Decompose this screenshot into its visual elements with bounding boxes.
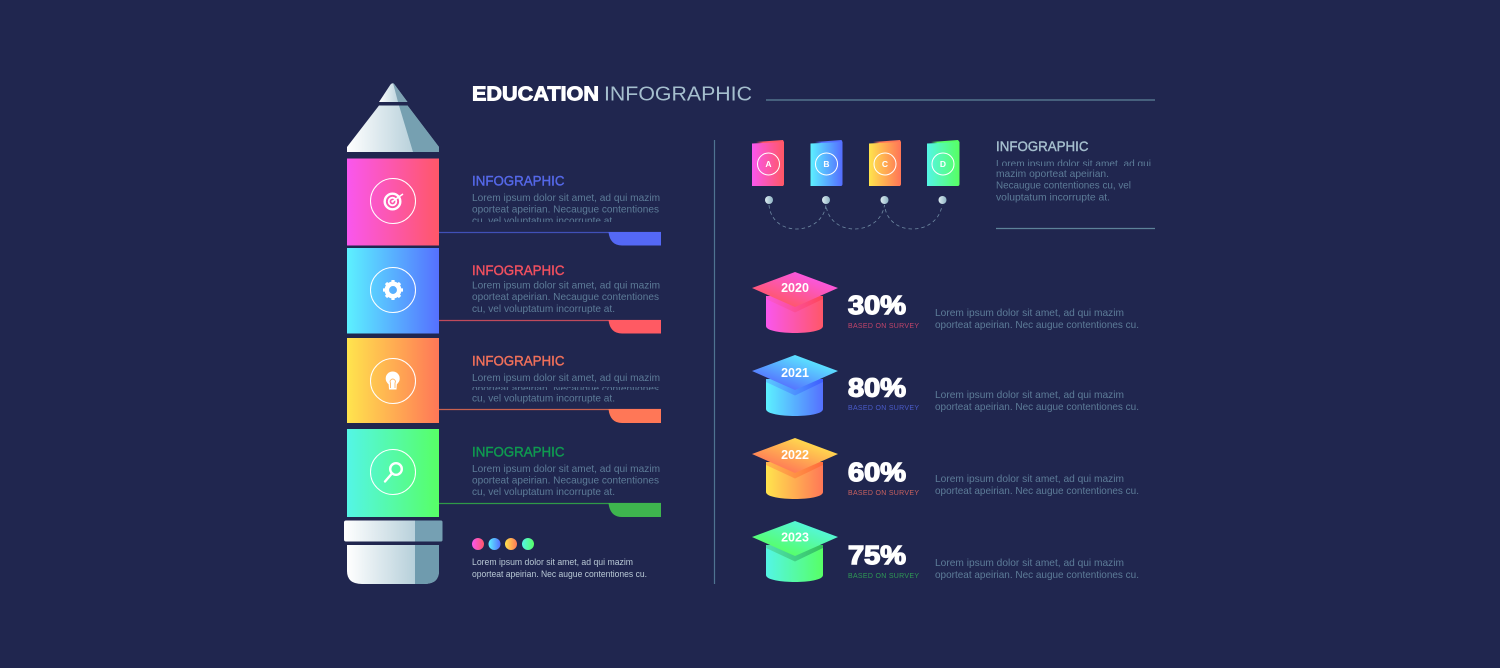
graduation cap xyxy=(752,355,838,416)
text block xyxy=(472,372,660,404)
based on survey: BASED ON SURVEY xyxy=(848,573,919,580)
panel: item 4 xyxy=(439,444,661,517)
cap row 2021 xyxy=(752,355,1139,416)
based on survey: BASED ON SURVEY xyxy=(848,490,919,497)
icon: gear xyxy=(370,268,416,312)
description: oporteat apeirian. Nec augue contentiones cu. xyxy=(935,319,1139,331)
book D: D xyxy=(940,159,946,169)
leader tab xyxy=(439,320,661,334)
text block: Lorem ipsum dolor sit amet, ad qui mazim xyxy=(472,280,660,292)
icon: light bulb xyxy=(370,358,416,404)
description: Lorem ipsum dolor sit amet, ad qui mazim xyxy=(935,557,1124,569)
text block: cu, vel voluptatum incorrupte at. xyxy=(472,486,615,498)
description: Lorem ipsum dolor sit amet, ad qui mazim xyxy=(935,389,1124,401)
legend text: Lorem ipsum dolor sit amet, ad qui mazim xyxy=(472,557,633,568)
text block: cu, vel voluptatum incorrupte at. xyxy=(472,215,615,227)
text block: Lorem ipsum dolor sit amet, ad qui mazim xyxy=(472,192,660,204)
based on survey: BASED ON SURVEY xyxy=(848,405,919,412)
heading: INFOGRAPHIC xyxy=(472,263,565,278)
description: oporteat apeirian. Nec augue contentiones cu. xyxy=(935,485,1139,497)
based on survey: BASED ON SURVEY xyxy=(848,323,919,330)
icon: target xyxy=(370,178,416,224)
description xyxy=(935,389,1139,413)
book C xyxy=(869,140,901,186)
description: oporteat apeirian. Nec augue contentiones cu. xyxy=(935,401,1139,413)
icon: magnifier xyxy=(370,450,416,494)
leader tab xyxy=(439,232,661,246)
graduation cap: 2023 xyxy=(781,530,809,544)
percent: 80% xyxy=(848,374,906,402)
pencil end xyxy=(347,545,439,584)
graduation cap: 2022 xyxy=(781,448,809,462)
colour dots legend xyxy=(472,538,534,550)
cap row 2023 xyxy=(752,521,1139,582)
book B xyxy=(810,140,842,186)
heading: INFOGRAPHIC xyxy=(472,354,565,368)
pencil xyxy=(344,83,442,584)
description: Lorem ipsum dolor sit amet, ad qui mazim xyxy=(935,473,1124,485)
text block: oporteat apeirian. Necaugue contentiones xyxy=(472,383,659,395)
panel: item 1 xyxy=(439,174,661,246)
graduation cap: 2020 xyxy=(781,281,809,295)
pencil segment: pink xyxy=(347,158,439,246)
description xyxy=(935,557,1139,581)
pencil segment: green xyxy=(347,429,439,517)
description: oporteat apeirian. Nec augue contentiones cu. xyxy=(935,569,1139,581)
leader tab xyxy=(439,409,661,423)
heading: INFOGRAPHIC xyxy=(472,444,565,460)
text block xyxy=(472,194,660,222)
panel: item 2 xyxy=(439,263,661,334)
books text block: voluptatum incorrupte at. xyxy=(996,192,1110,204)
text block: cu, vel voluptatum incorrupte at. xyxy=(472,392,615,404)
pencil ferrule xyxy=(344,520,442,542)
text block: Lorem ipsum dolor sit amet, ad qui mazim xyxy=(472,372,660,384)
heading: INFOGRAPHIC xyxy=(472,174,565,188)
text block: oporteat apeirian. Necaugue contentiones xyxy=(472,474,659,486)
books text block: mazim oporteat apeirian. xyxy=(996,168,1109,180)
cap row 2020 xyxy=(752,272,1139,333)
title xyxy=(472,84,1155,106)
books text block: Lorem ipsum dolor sit amet, ad qui xyxy=(996,158,1151,170)
text block: cu, vel voluptatum incorrupte at. xyxy=(472,303,615,315)
cap row 2022 xyxy=(752,438,1139,499)
pencil segment: yellow xyxy=(347,338,439,423)
percent: 75% xyxy=(848,542,906,570)
graduation cap xyxy=(752,521,838,582)
percent: 30% xyxy=(848,292,906,320)
percent: 60% xyxy=(848,459,906,487)
pencil segment: blue xyxy=(347,248,439,334)
timeline connectors xyxy=(765,196,946,229)
book B: B xyxy=(823,159,830,169)
pencil tip xyxy=(347,83,439,152)
description xyxy=(935,307,1139,331)
graduation cap xyxy=(752,438,838,499)
books text block: Necaugue contentiones cu, vel xyxy=(996,180,1131,192)
title: EDUCATION xyxy=(472,84,599,106)
description xyxy=(935,473,1139,497)
books text block: INFOGRAPHIC xyxy=(996,139,1089,154)
graduation cap xyxy=(752,272,838,333)
legend text xyxy=(472,557,647,580)
text block: oporteat apeirian. Necaugue contentiones xyxy=(472,291,659,303)
book C: C xyxy=(882,159,888,169)
text block xyxy=(472,280,660,315)
panel: item 3 xyxy=(439,354,661,423)
text block xyxy=(472,463,660,498)
book D xyxy=(927,140,960,186)
text block: oporteat apeirian. Necaugue contentiones xyxy=(472,204,659,216)
book A: A xyxy=(765,159,772,169)
description: Lorem ipsum dolor sit amet, ad qui mazim xyxy=(935,307,1124,319)
legend text: oporteat apeirian. Nec augue contentiones cu. xyxy=(472,569,647,580)
book A xyxy=(752,140,784,186)
graduation cap: 2021 xyxy=(781,366,809,380)
text block: Lorem ipsum dolor sit amet, ad qui mazim xyxy=(472,463,660,475)
books text block xyxy=(996,139,1155,228)
title: INFOGRAPHIC xyxy=(604,84,752,106)
leader tab xyxy=(439,503,661,517)
